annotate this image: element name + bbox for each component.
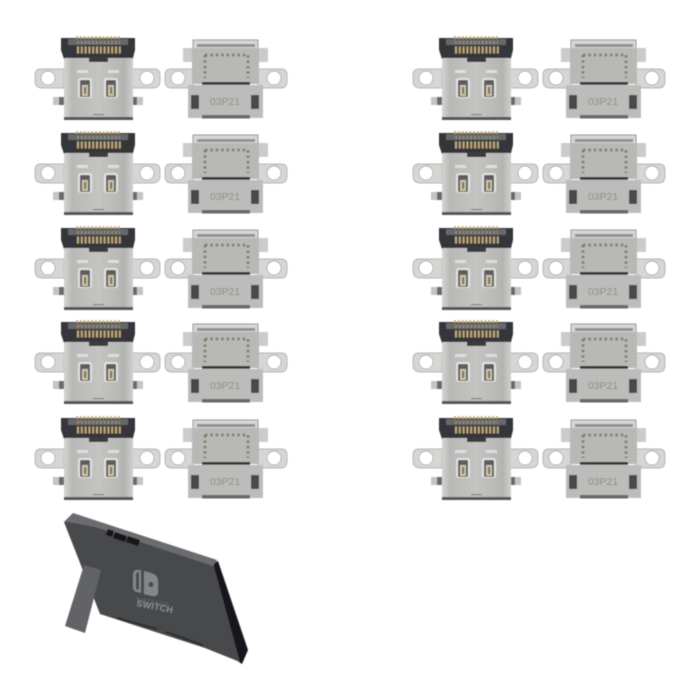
bottom slot marks [117, 618, 203, 645]
game console rear view: SWITCH [136, 598, 174, 615]
connector pair left column row 1 [35, 38, 287, 120]
kickstand [65, 565, 101, 633]
console right edge [213, 561, 248, 664]
connector pair left column row 4 [35, 322, 287, 404]
logo [133, 570, 158, 596]
connector pair right column row 5 [413, 418, 665, 500]
connector pair right column row 2 [413, 132, 665, 215]
connector pair left column row 2 [35, 132, 287, 215]
connector pair right column row 3 [413, 228, 665, 310]
connector pair right column row 1 [413, 38, 665, 120]
vents [106, 529, 140, 546]
console top edge [64, 513, 217, 566]
connector pair right column row 4 [413, 322, 665, 404]
game console rear view [64, 513, 248, 664]
connector pair left column row 5 [35, 418, 287, 500]
console back panel [64, 516, 240, 662]
connector pair left column row 3 [35, 228, 287, 310]
brand text: NINTENDO [136, 596, 169, 607]
